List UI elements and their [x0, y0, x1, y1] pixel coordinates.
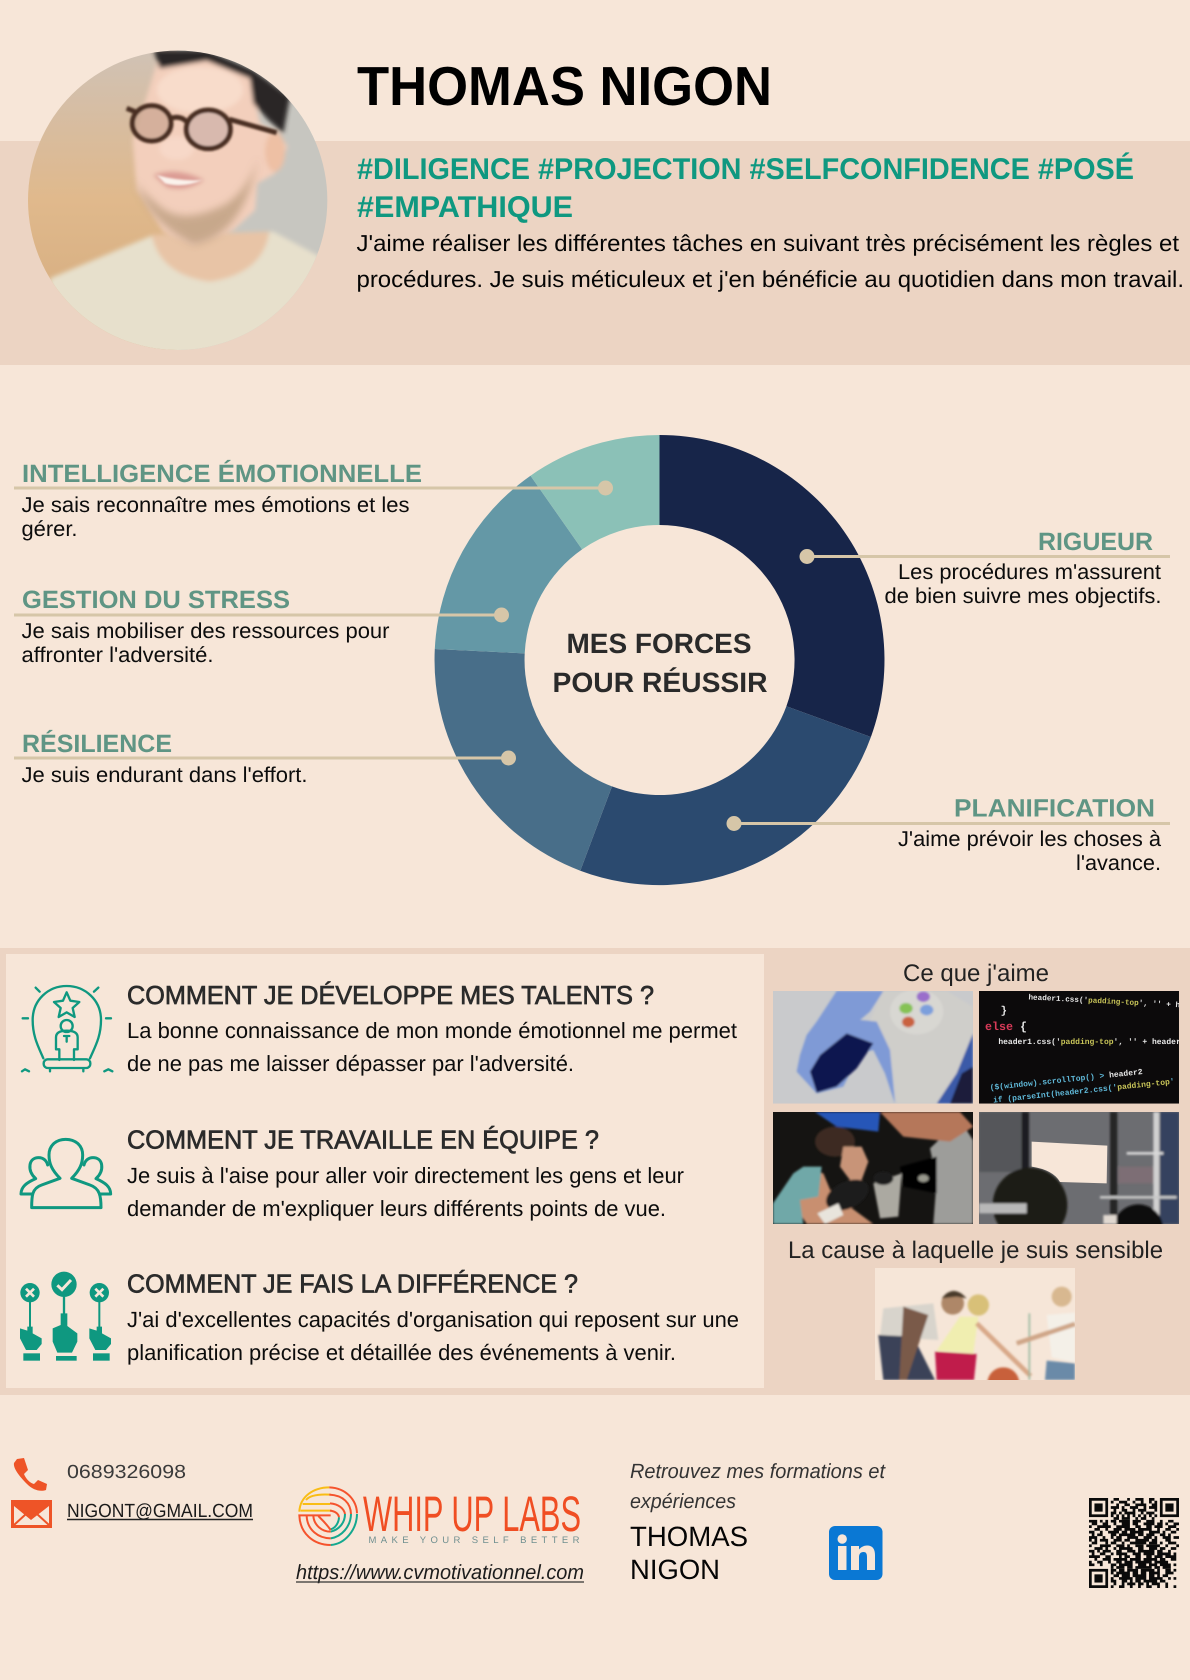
photo: code screen [979, 991, 1186, 1105]
logo tagline: MAKE YOUR SELF BETTER [368, 1535, 580, 1546]
header band [0, 141, 1190, 365]
callout: intelligence émotionnelle [14, 459, 613, 541]
qr code [1089, 1499, 1179, 1587]
photo: code screen: header1.css('padding-top', '' + header1 [998, 1038, 1186, 1047]
callout: planification: PLANIFICATION [954, 794, 1155, 822]
heading: équipe: COMMENT JE TRAVAILLE EN ÉQUIPE ? [127, 1124, 599, 1154]
text: équipe [127, 1163, 684, 1221]
photo: code screen: ($(window).scrollTop() > header2 [989, 1068, 1143, 1093]
intro text: procédures. Je suis méticuleux et j'en bénéficie au quotidien dans mon travail. [356, 266, 1184, 292]
donut centre title: POUR RÉUSSIR [552, 667, 768, 698]
lower band [0, 948, 1190, 1395]
logo: whip up labs [299, 1486, 581, 1546]
text: équipe: demander de m'expliquer leurs différents points de vue. [127, 1196, 666, 1221]
donut centre title: MES FORCES [566, 628, 752, 659]
photo: portrait [28, 50, 328, 350]
photo: code screen: if (parseInt(header2.css('padding-top' [993, 1077, 1175, 1105]
icon: choice hands [20, 1272, 111, 1361]
linkedin name: NIGON [630, 1554, 720, 1585]
linkedin intro: expériences [630, 1490, 736, 1513]
photo: game controller [773, 989, 973, 1104]
callout: planification: J'aime prévoir les choses à [898, 827, 1161, 851]
heading: cause: La cause à laquelle je suis sensible [788, 1237, 1163, 1264]
callout: intelligence émotionnelle: gérer. [22, 517, 78, 541]
photo: code screen: } [1001, 1004, 1007, 1017]
photo: gym [979, 1112, 1179, 1224]
callout: rigueur [800, 528, 1170, 608]
callout: intelligence émotionnelle: Je sais reconnaître mes émotions et les [22, 493, 409, 517]
phone number: 0689326098 [67, 1462, 186, 1483]
linkedin intro: Retrouvez mes formations et [630, 1460, 886, 1483]
text: différence: J'ai d'excellentes capacités d'organisation qui reposent sur une [127, 1307, 739, 1332]
callout: résilience: RÉSILIENCE [22, 729, 172, 758]
icon: phone [14, 1458, 47, 1491]
heading: différence: COMMENT JE FAIS LA DIFFÉRENCE ? [127, 1268, 578, 1298]
hashtags: #EMPATHIQUE [357, 191, 573, 224]
donut chart [435, 435, 884, 885]
icon: bulb with person and star [22, 986, 112, 1071]
email: NIGONT@GMAIL.COM [67, 1501, 253, 1522]
text: différence [127, 1307, 739, 1365]
linkedin intro [630, 1460, 886, 1513]
callout: résilience: Je suis endurant dans l'effort. [22, 763, 308, 787]
photo: code screen: header1.css('padding-top', '' + h [1028, 993, 1180, 1010]
hashtags: #DILIGENCE #PROJECTION #SELFCONFIDENCE #POSÉ [357, 152, 1134, 186]
hashtags [357, 152, 1134, 224]
callout: gestion du stress: Je sais mobiliser des ressources pour [22, 619, 390, 643]
callout: gestion du stress: affronter l'adversité. [22, 643, 214, 667]
text: différence: planification précise et détaillée des événements à venir. [127, 1340, 676, 1365]
icon: team [21, 1139, 111, 1208]
website: https://www.cvmotivationnel.com [296, 1561, 584, 1584]
icon: mail [11, 1500, 52, 1528]
callout: planification [726, 794, 1170, 875]
text: talents [127, 1018, 737, 1076]
text: talents: La bonne connaissance de mon monde émotionnel me permet [127, 1018, 737, 1043]
donut centre title [552, 628, 768, 698]
photo: boxing [773, 1112, 973, 1224]
heading: talents: COMMENT JE DÉVELOPPE MES TALENTS ? [127, 980, 654, 1010]
callout: résilience [14, 729, 516, 787]
text: talents: de ne pas me laisser dépasser par l'adversité. [127, 1051, 574, 1076]
callout: planification: l'avance. [1076, 851, 1161, 875]
text: équipe: Je suis à l'aise pour aller voir directement les gens et leur [127, 1163, 684, 1188]
callout: gestion du stress: GESTION DU STRESS [22, 586, 290, 614]
photo: family sport [875, 1268, 1075, 1380]
callout: gestion du stress [14, 586, 509, 667]
icon: linkedin [829, 1526, 882, 1580]
intro text: J'aime réaliser les différentes tâches en suivant très précisément les règles et [356, 230, 1180, 256]
heading: ce que j'aime: Ce que j'aime [903, 960, 1049, 987]
callout: rigueur: de bien suivre mes objectifs. [884, 584, 1162, 608]
linkedin name [630, 1521, 748, 1585]
logo wordmark: WHIP UP LABS [363, 1486, 581, 1542]
panel: talents [6, 954, 764, 1388]
photo: code screen: else { [985, 1020, 1027, 1034]
linkedin name: THOMAS [630, 1521, 748, 1552]
intro text [356, 230, 1184, 292]
callout: rigueur: RIGUEUR [1038, 528, 1153, 556]
logo mark [299, 1487, 357, 1545]
callout: rigueur: Les procédures m'assurent [898, 560, 1161, 584]
callout: intelligence émotionnelle: INTELLIGENCE ÉMOTIONNELLE [22, 459, 422, 488]
title: THOMAS NIGON [357, 55, 772, 117]
